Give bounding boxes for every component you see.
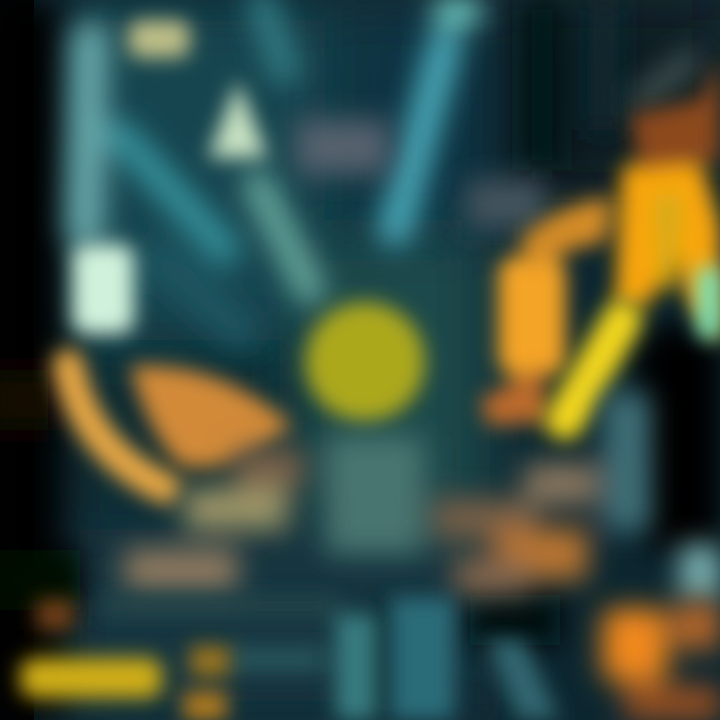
bottom left yellow label smudge (20, 600, 230, 720)
dark right silhouette (470, 0, 720, 645)
dark left edge (0, 0, 80, 720)
muted purple patches (296, 120, 546, 228)
bottom vertical stripes (100, 596, 560, 720)
yellow slash (565, 320, 622, 420)
pale highlights (72, 20, 268, 334)
teal accent at right edge (698, 268, 720, 338)
yellow circle (305, 302, 425, 422)
right orange figure (480, 60, 720, 426)
bottom right orange blocks (602, 603, 720, 720)
orange leaf shape (130, 365, 292, 468)
left orange arc (68, 365, 165, 488)
lower muted bands (124, 393, 720, 600)
teal diagonal beams (85, 5, 690, 330)
